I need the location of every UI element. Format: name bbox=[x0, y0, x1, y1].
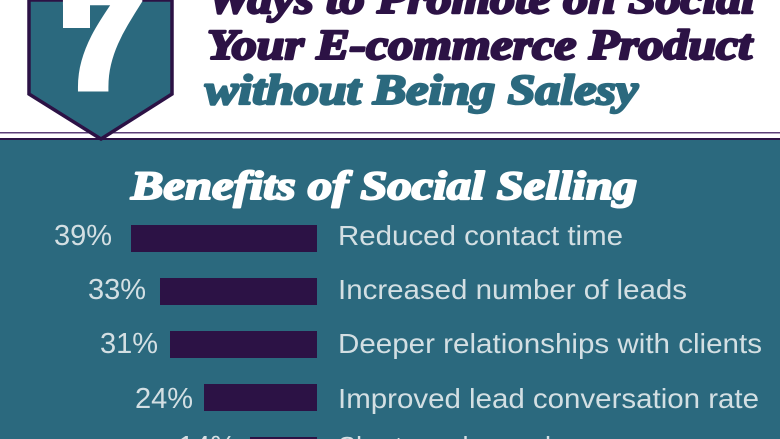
title: Your E-commerce Product bbox=[207, 23, 754, 69]
bar row: 24% improved lead conversation rate: Improved lead conversation rate bbox=[338, 383, 759, 414]
bar row: 24% improved lead conversation rate bbox=[135, 383, 759, 415]
bar row: 39% reduced contact time: Reduced contact time bbox=[338, 220, 623, 251]
icon: shield badge with number 7 bbox=[29, 0, 172, 139]
bar row: 39% reduced contact time bbox=[54, 220, 623, 252]
bar row: 33% increased number of leads: Increased number of leads bbox=[338, 274, 687, 305]
bar row: 31% deeper relationships with clients bbox=[100, 328, 762, 360]
bar row: 31% deeper relationships with clients: Deeper relationships with clients bbox=[338, 328, 762, 359]
bar row: 33% increased number of leads bbox=[88, 274, 687, 306]
bar row: 14% shorter sales cycle bbox=[178, 431, 566, 439]
title: without Being Salesy bbox=[205, 68, 638, 114]
heading: benefits of social selling: Benefits of Social Selling bbox=[130, 163, 637, 208]
bar row: 39% reduced contact time: 39% bbox=[54, 220, 112, 252]
bar row: 24% improved lead conversation rate: 24% bbox=[135, 383, 193, 415]
bar row: 31% deeper relationships with clients: 31% bbox=[100, 328, 158, 360]
panel: benefits background bbox=[0, 140, 780, 439]
title bbox=[205, 0, 755, 114]
bar row: 33% increased number of leads: 33% bbox=[88, 274, 146, 306]
